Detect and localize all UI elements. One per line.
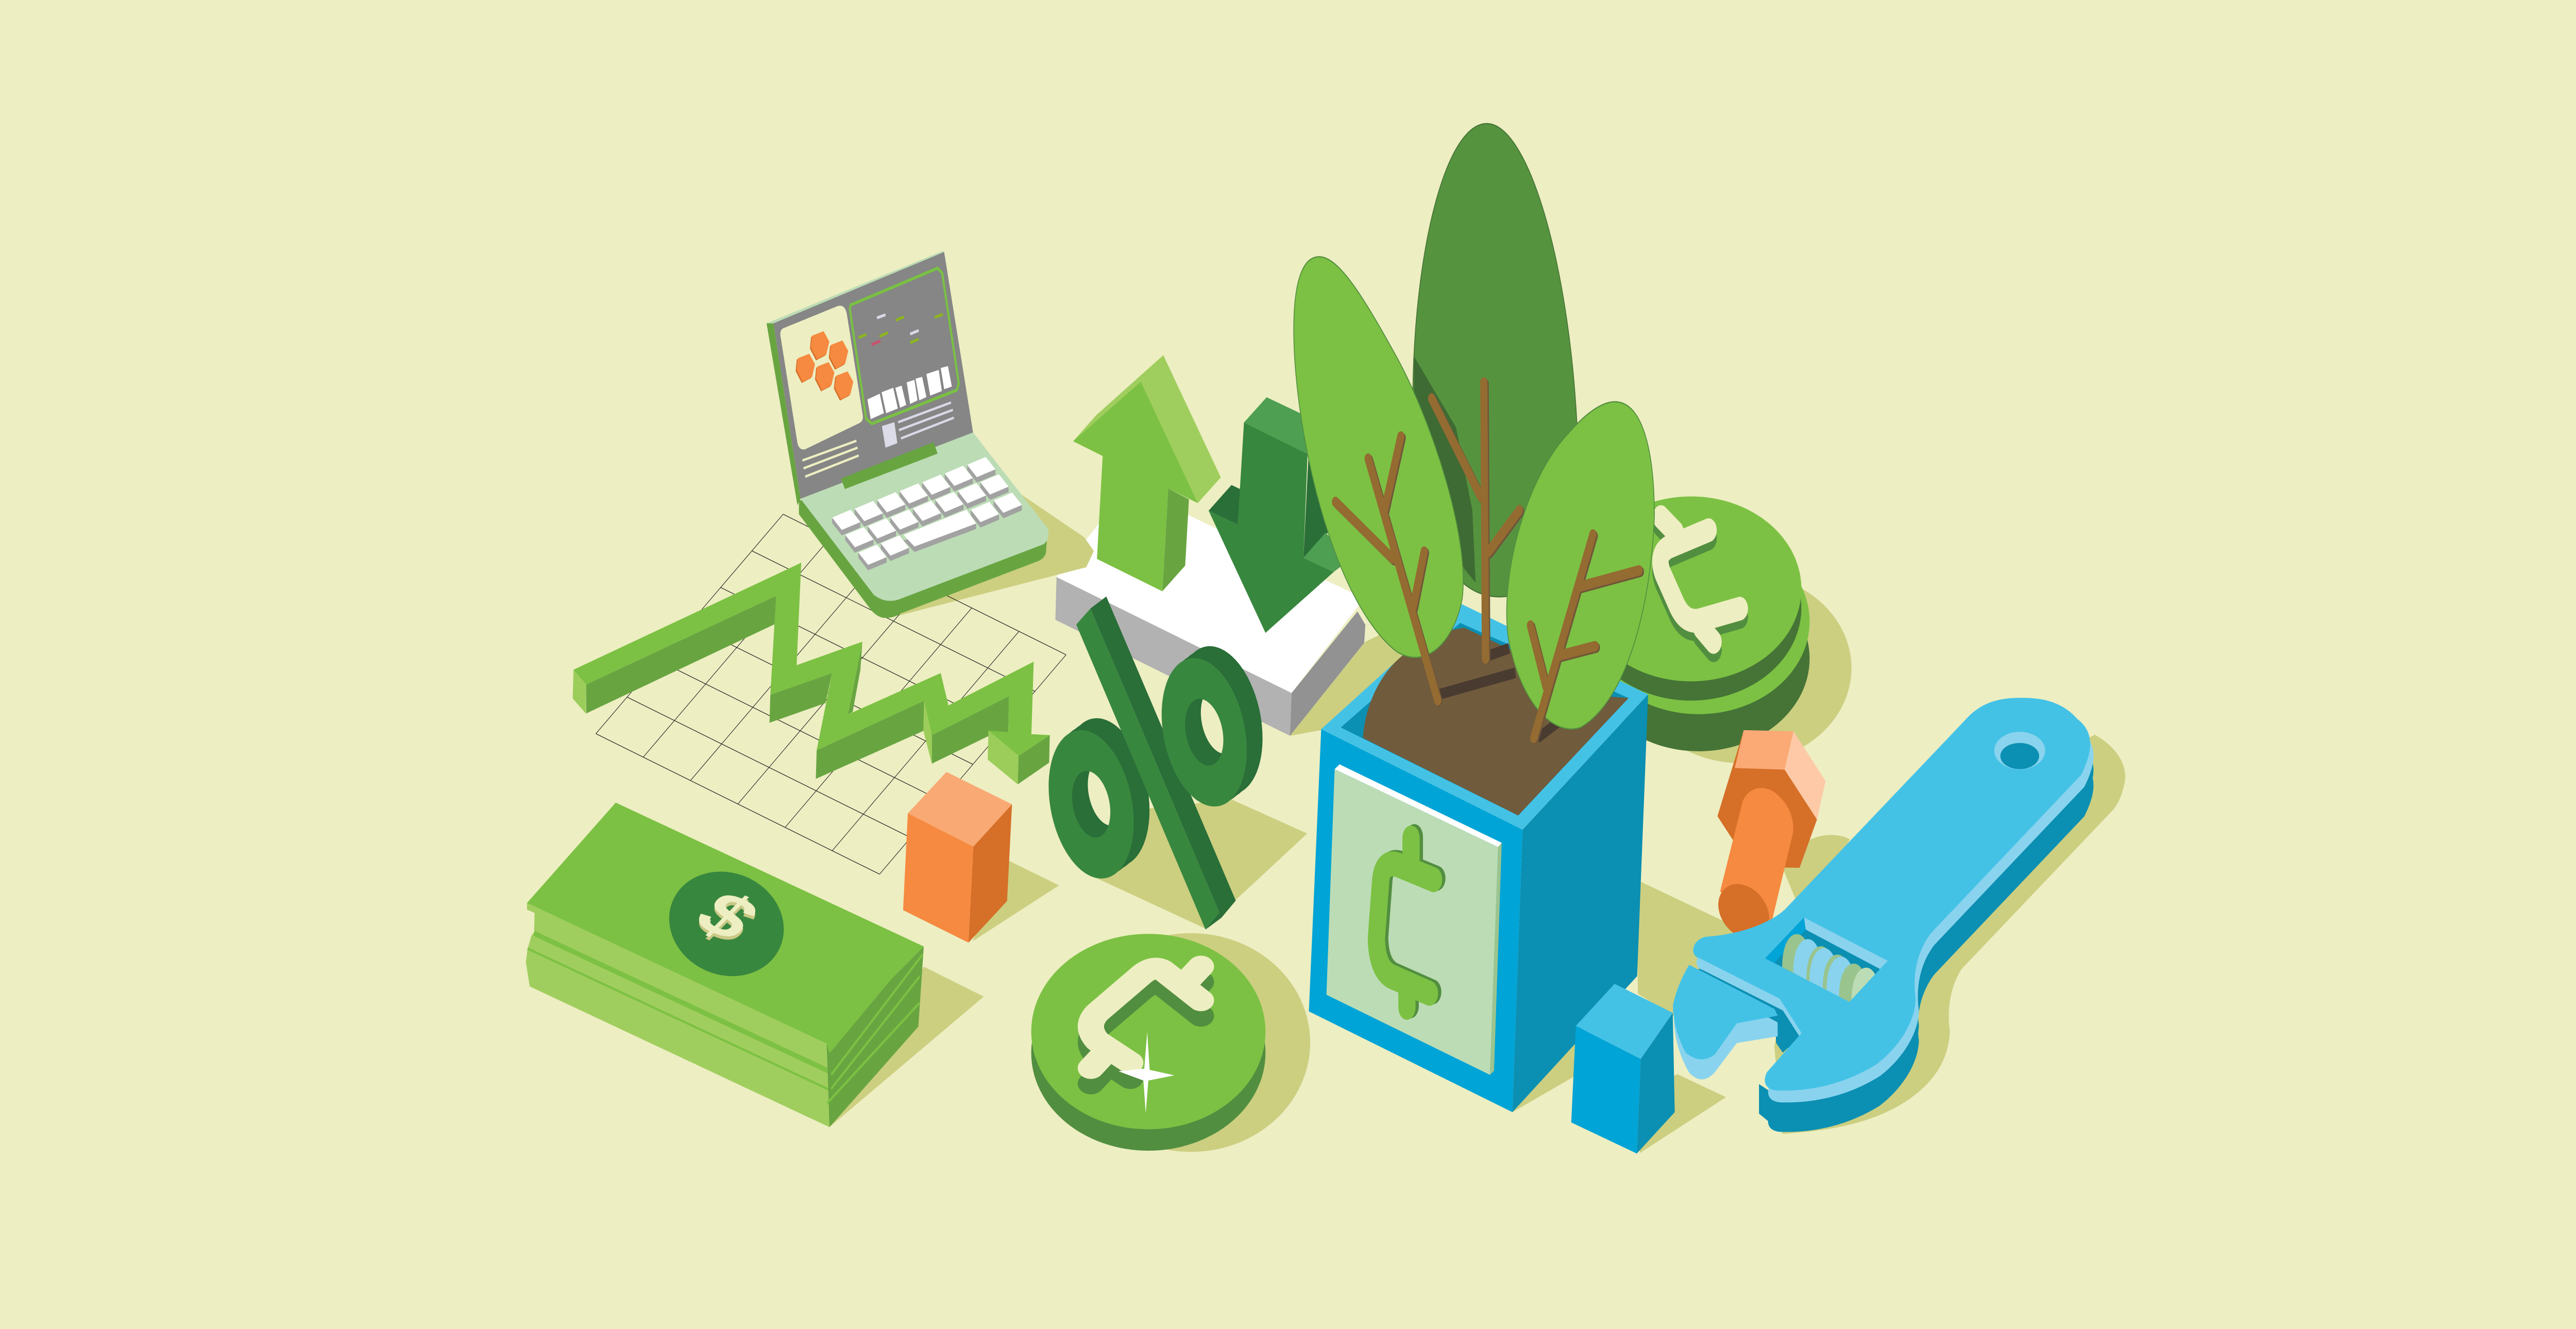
coin stack	[1581, 496, 1809, 751]
soil shadows	[1439, 648, 1558, 738]
ground shadows	[829, 492, 2125, 1153]
laptop lid	[767, 251, 973, 505]
down arrow	[1209, 397, 1350, 633]
percent lower ring	[1048, 718, 1150, 879]
planter rim	[1321, 603, 1648, 830]
blue cube	[1571, 984, 1675, 1154]
dollar sign: $	[680, 879, 775, 953]
wrench hole	[1994, 732, 2045, 769]
stack of bills	[526, 803, 924, 1127]
orange cube	[903, 772, 1012, 943]
sparkle	[1118, 1032, 1175, 1114]
right leaf	[1507, 402, 1654, 739]
cent cut-out	[1091, 967, 1201, 1068]
wrench head and handle	[1693, 698, 2090, 1090]
cent cut-out depth	[1091, 982, 1201, 1084]
wrench extruded side	[1697, 724, 2093, 1132]
laptop screen: white panel with hexagons	[781, 306, 863, 477]
platform	[1055, 486, 1365, 736]
planter right face	[1513, 695, 1648, 1112]
laptop base	[799, 476, 1047, 618]
chart grid	[596, 514, 1066, 874]
bill medallion	[666, 864, 787, 984]
planter box	[1309, 603, 1648, 1112]
up arrow	[1073, 355, 1221, 591]
wrench rim	[1697, 710, 2093, 1102]
zigzag down arrow	[573, 563, 1050, 784]
percent sign	[1048, 597, 1263, 930]
planter left face	[1309, 729, 1522, 1112]
laptop hinge	[841, 442, 938, 489]
percent upper ring	[1161, 646, 1263, 806]
front coin	[1031, 934, 1265, 1151]
illustration: financial growth isometric scene	[526, 123, 2126, 1153]
wrench adjuster window	[1765, 917, 1888, 1018]
percent slash	[1076, 597, 1236, 930]
cent cut-out on coin stack	[1660, 517, 1740, 650]
soil	[1363, 628, 1629, 815]
dollar sign shadow: $	[680, 883, 775, 956]
bolt	[1713, 730, 1825, 949]
keyboard	[832, 457, 1022, 570]
laptop	[767, 251, 1048, 618]
cent sign on label	[1377, 837, 1437, 1007]
laptop screen: data panel	[850, 268, 959, 448]
back leaf	[1413, 124, 1578, 597]
wrench lower jaw	[1673, 965, 1795, 1080]
left leaf	[1294, 257, 1463, 658]
wrench	[1673, 698, 2093, 1132]
planter label	[1327, 764, 1502, 1075]
branches	[1335, 382, 1521, 701]
